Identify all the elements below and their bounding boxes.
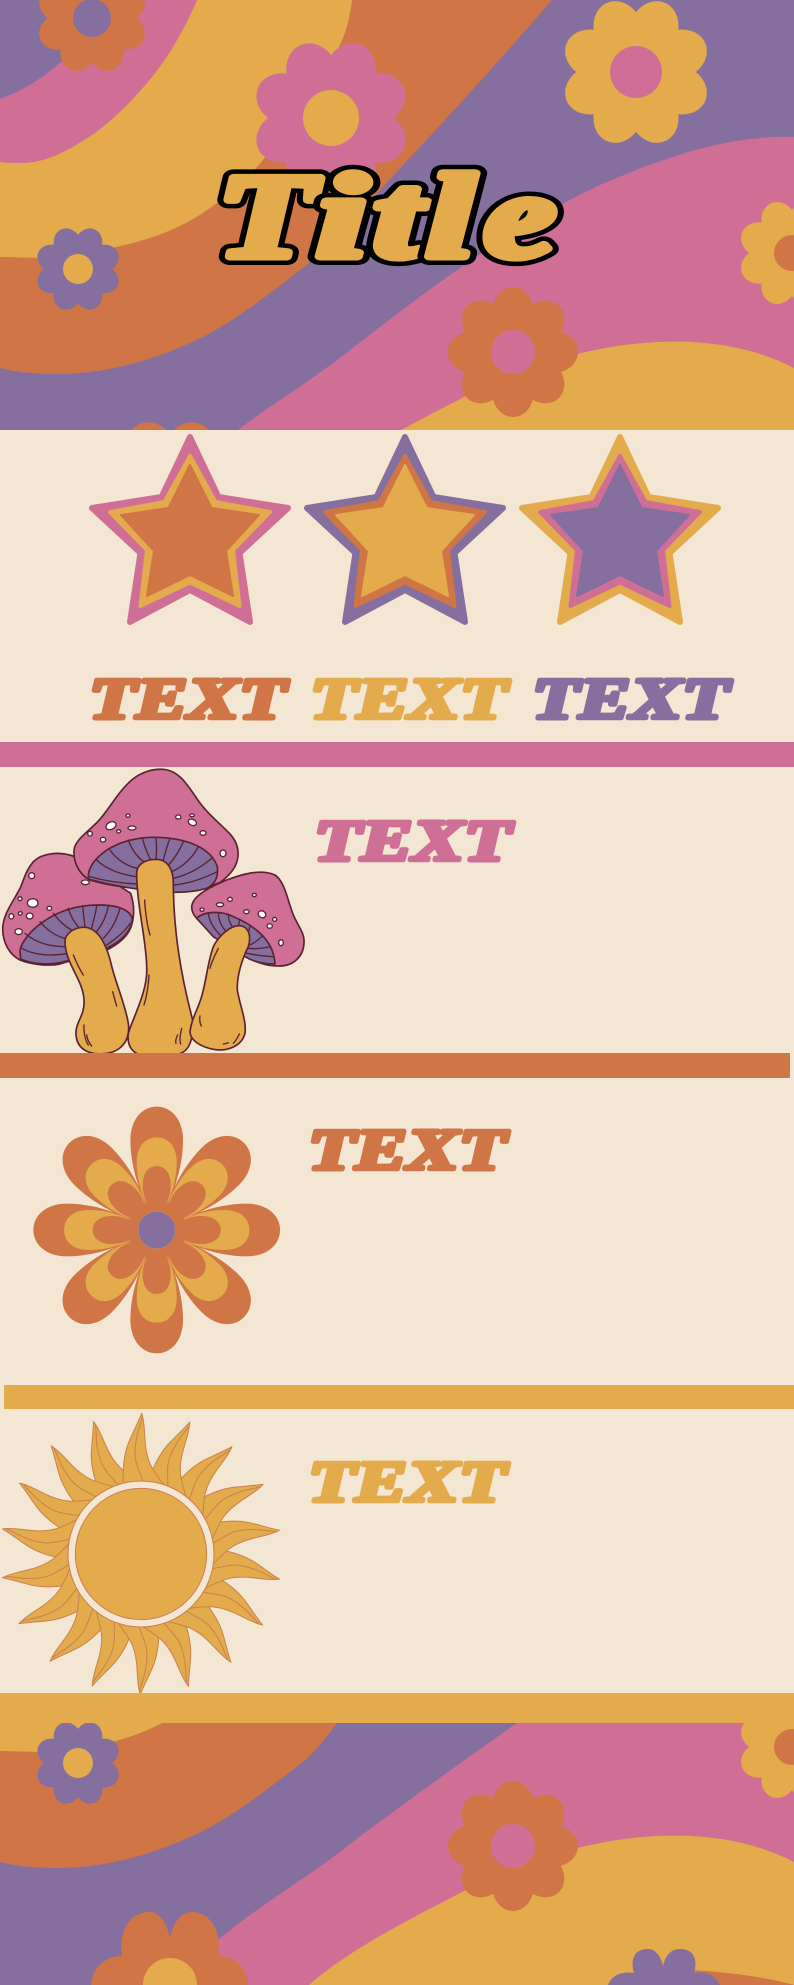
icon: pink star (92, 437, 288, 622)
divider: pink bar (0, 742, 794, 767)
title (217, 150, 556, 282)
icon: mushrooms (3, 769, 304, 1055)
icon: yellow star (522, 437, 718, 622)
title: t (373, 150, 427, 282)
icon: sun (0, 1413, 284, 1695)
panel: header groovy waves and flowers (0, 0, 794, 430)
icon: purple star (307, 437, 503, 622)
title: l (426, 150, 476, 282)
center mushroom (74, 769, 238, 1055)
title: i (316, 150, 368, 282)
heading: mushroom section: TEXT (314, 808, 514, 873)
heading: flower section: TEXT (308, 1117, 509, 1182)
icon: layered flower (33, 1107, 280, 1353)
title: l (426, 150, 476, 282)
label: star two: TEXT (310, 666, 510, 731)
left mushroom (3, 853, 134, 1054)
title: T (217, 150, 321, 282)
label: star one: TEXT (89, 666, 289, 731)
divider: orange bar (0, 1053, 790, 1078)
title: i (316, 150, 368, 282)
title: e (484, 150, 556, 282)
title: t (373, 150, 427, 282)
divider: lower yellow bar (0, 1693, 794, 1723)
heading: sun section: TEXT (308, 1449, 509, 1514)
panel: footer groovy waves and flowers (0, 1723, 794, 1985)
title: e (484, 150, 556, 282)
title: T (217, 150, 321, 282)
divider: yellow bar (4, 1385, 794, 1409)
label: star three: TEXT (532, 666, 732, 731)
right mushroom (190, 872, 304, 1050)
